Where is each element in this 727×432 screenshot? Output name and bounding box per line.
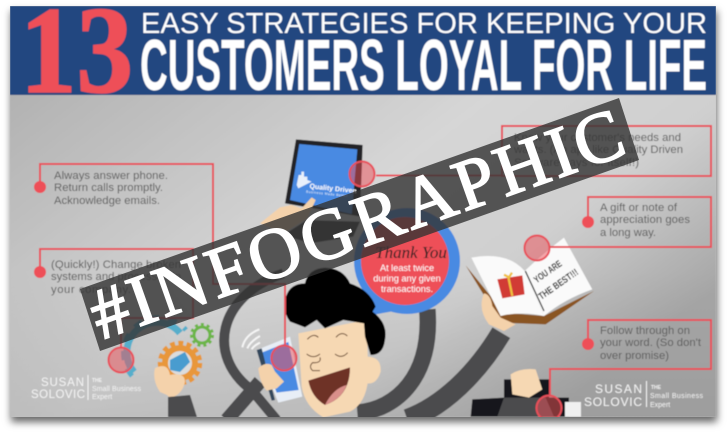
left arm ring — [224, 273, 283, 420]
callout text: phone: Always answer phone. — [54, 170, 168, 182]
logo left: SOLOVIC — [31, 389, 85, 401]
icon: tablet with hand: Quality Driven — [309, 183, 357, 195]
callout text: systems — [51, 259, 181, 296]
icon: gears — [124, 318, 212, 383]
callout dots — [34, 181, 594, 350]
callout text: needs: Know your customer's needs and — [514, 132, 681, 144]
callout text: phone: Acknowledge emails. — [54, 195, 160, 207]
gift — [497, 275, 525, 298]
title line 1: EASY STRATEGIES FOR KEEPING YOUR — [141, 8, 707, 40]
book text: YOU ARE — [532, 258, 565, 286]
icon: thank you speech bubble — [354, 208, 460, 315]
icon: tablet with hand: Business Made Better — [306, 190, 349, 198]
logo left: SUSAN — [41, 377, 84, 389]
callout text: systems: your company. — [51, 284, 131, 296]
book text: THE BEST!!! — [537, 267, 581, 302]
logo left: THE — [92, 378, 103, 384]
callout text: phone — [54, 170, 168, 207]
callout text: gift: appreciation goes — [600, 214, 690, 226]
callout text: follow through: over promise) — [600, 350, 669, 362]
logo left: Expert — [92, 394, 112, 401]
icon: hand holding gears — [154, 366, 197, 417]
open mouth — [308, 367, 350, 405]
callout text: follow through: your word. (So don't — [600, 337, 702, 349]
thank you text: Thank You — [375, 243, 447, 262]
thank you text: during any given — [373, 274, 441, 284]
callout text: phone: Return calls promptly. — [54, 182, 163, 194]
icon: camera with hand — [471, 369, 581, 417]
right arm — [357, 309, 501, 419]
callout text: gift — [600, 202, 690, 239]
header banner — [10, 0, 716, 119]
translucent hotspot circles — [108, 162, 562, 420]
banner text: #INFOGRAPHIC — [80, 93, 634, 355]
closed eyes and nose — [307, 334, 348, 371]
icon: open book — [466, 238, 594, 331]
logo right: Small Business — [650, 393, 704, 400]
thank you text: At least twice — [380, 263, 434, 273]
icon: tablet with hand — [260, 139, 363, 243]
ear — [367, 357, 381, 384]
callout text: gift: a long way. — [600, 227, 656, 239]
callout text: gift: A gift or note of — [600, 202, 678, 214]
logo right: THE — [651, 385, 662, 391]
callout text: needs: wants. (An app like Quality Driven — [513, 144, 683, 156]
character head — [285, 268, 386, 417]
thank you text — [373, 243, 447, 294]
callout text: systems: (Quickly!) Change broken — [51, 259, 181, 271]
logo left — [31, 375, 142, 401]
callout text: follow through: Follow through on — [600, 325, 690, 337]
hair — [285, 268, 386, 355]
thank you text: transactions. — [381, 284, 433, 294]
callout text: follow through — [600, 325, 702, 362]
logo left: Small Business — [92, 386, 142, 393]
logo right: SUSAN — [595, 382, 642, 396]
logo right: Expert — [650, 402, 670, 409]
icon: phone with hand and signal — [242, 329, 302, 403]
book text — [532, 260, 579, 300]
logo right: SOLOVIC — [584, 395, 642, 409]
callout text: needs: Software pays for itself!) — [514, 157, 639, 169]
connector lines — [40, 126, 711, 396]
hand holding book — [482, 293, 516, 331]
logo right — [584, 381, 704, 409]
face — [298, 320, 368, 417]
callout text: needs — [513, 132, 683, 169]
callout text: systems: systems and processes in — [51, 271, 181, 283]
